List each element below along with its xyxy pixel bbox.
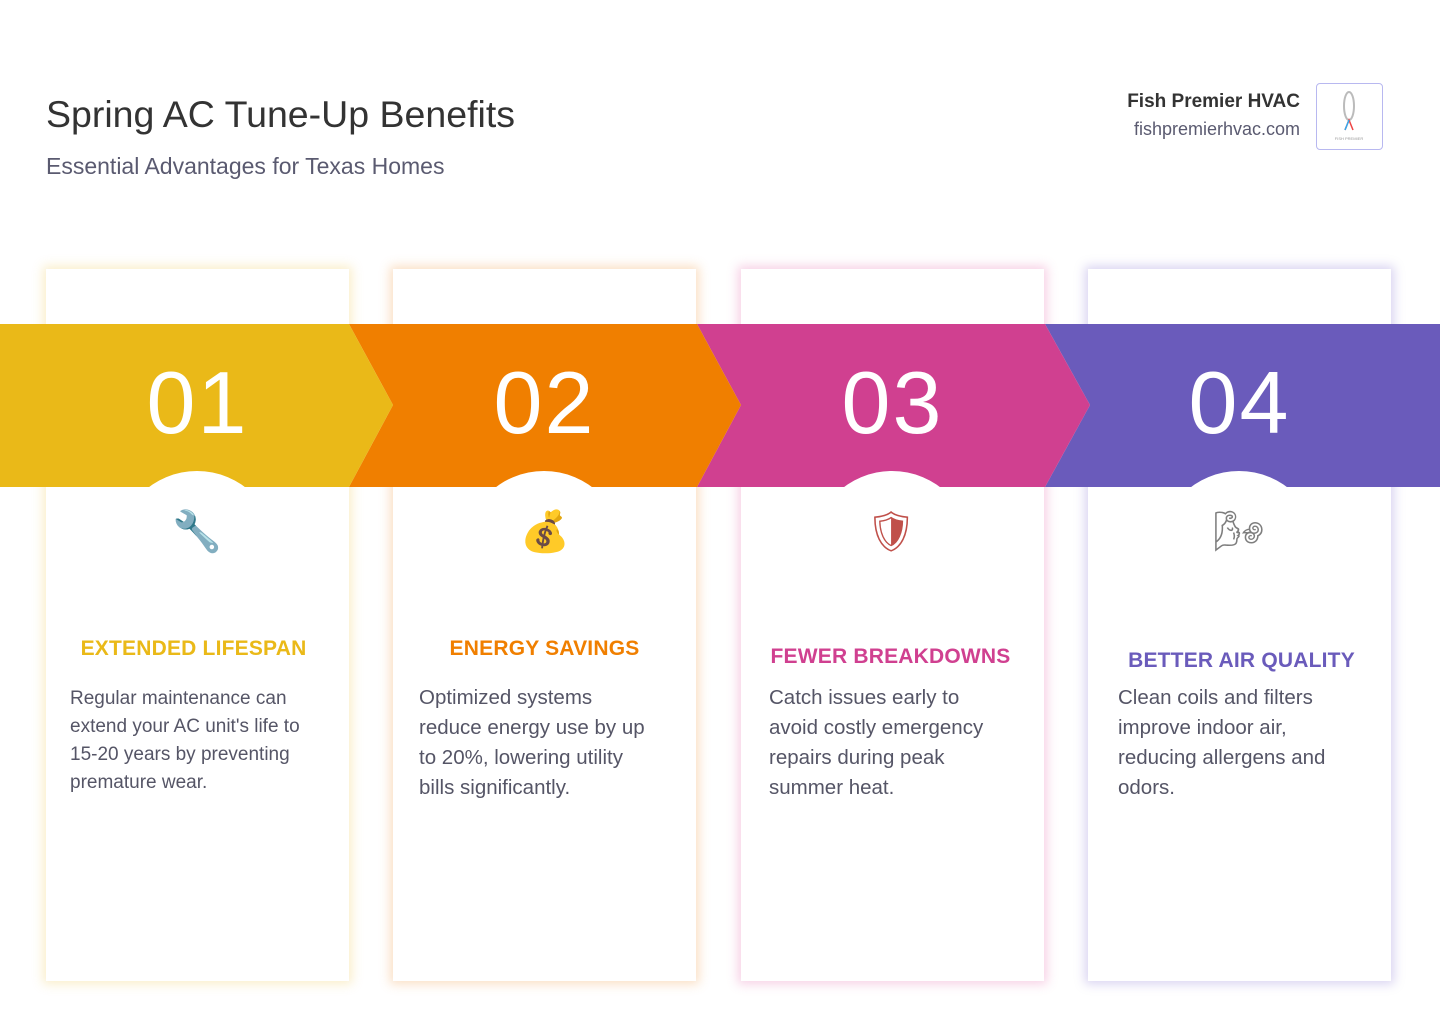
circles bbox=[117, 471, 277, 631]
subtitle: Essential Advantages for Texas Homes bbox=[46, 153, 444, 179]
numbers: 01 bbox=[147, 353, 248, 452]
text: 03 bbox=[842, 353, 943, 452]
text 3: Catch issues early to avoid costly emergency repairs during peak summer heat. bbox=[769, 686, 983, 799]
heading 4: BETTER AIR QUALITY bbox=[1128, 649, 1355, 672]
card 3 bbox=[741, 269, 1044, 981]
card 1 bbox=[46, 269, 349, 981]
title: Spring AC Tune-Up Benefits bbox=[46, 93, 515, 135]
arrow band bbox=[0, 324, 1440, 487]
text: 02 bbox=[494, 353, 595, 452]
card 4 bbox=[1088, 269, 1391, 981]
brand text: fishpremierhvac.com bbox=[1134, 119, 1300, 139]
text 2: Optimized systems reduce energy use by up to 20%, lowering utility bills significantly. bbox=[419, 686, 645, 799]
brand text: Fish Premier HVAC bbox=[1127, 91, 1300, 112]
heading 1: EXTENDED LIFESPAN bbox=[81, 637, 306, 660]
heading 3: FEWER BREAKDOWNS bbox=[770, 645, 1011, 668]
text: 04 bbox=[1189, 353, 1290, 452]
text 4: Clean coils and filters improve indoor air, reducing allergens and odors. bbox=[1118, 686, 1325, 799]
icon: money bag: 💰 bbox=[520, 509, 570, 555]
card 2 bbox=[393, 269, 696, 981]
heading 2: ENERGY SAVINGS bbox=[450, 637, 639, 660]
icon: wrench: 🔧 bbox=[172, 509, 222, 555]
logo: FISH PREMIER bbox=[1335, 136, 1363, 141]
icon: shield: 🛡 bbox=[866, 509, 916, 555]
logo bbox=[1316, 83, 1383, 150]
icon: wind face: 🌬 bbox=[1214, 509, 1264, 555]
brand text bbox=[1127, 91, 1300, 139]
text 1: Regular maintenance can extend your AC unit's life to 15-20 years by preventing premature wear. bbox=[70, 688, 300, 793]
